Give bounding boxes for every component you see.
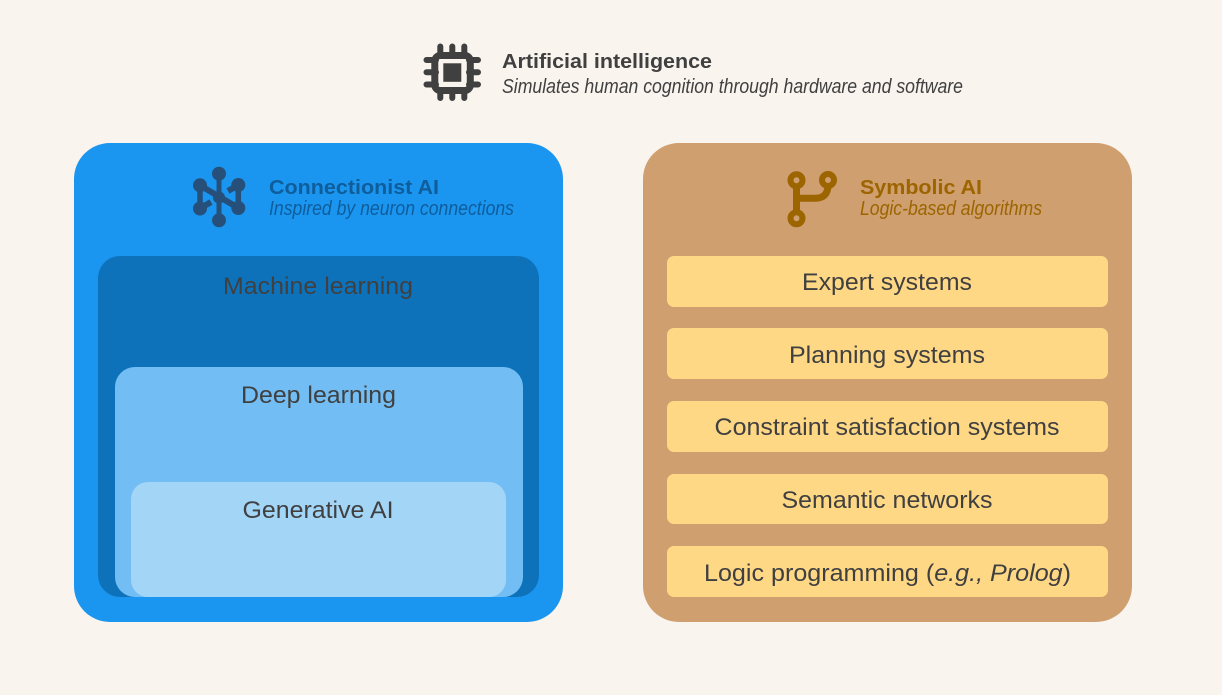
subtitle: Simulates human cognition through hardware and software — [502, 75, 963, 98]
header: artificial intelligence — [426, 46, 963, 98]
panel: connectionist AI — [74, 143, 563, 622]
icon: microchip — [426, 46, 478, 98]
subheading: logic-based algorithms: Logic-based algorithms — [860, 197, 1042, 220]
item: semantic networks — [667, 474, 1108, 524]
item: expert systems — [667, 256, 1108, 307]
item: planning systems — [667, 328, 1108, 379]
item: semantic networks: Semantic networks — [782, 487, 992, 514]
box: machine learning: Machine learning — [223, 273, 413, 300]
item: constraint satisfaction systems — [667, 401, 1108, 452]
box: generative AI — [131, 482, 506, 597]
item: logic programming — [667, 546, 1108, 597]
title: Artificial intelligence — [502, 51, 712, 73]
box: deep learning: Deep learning — [241, 382, 396, 409]
box: generative AI: Generative AI — [242, 497, 394, 524]
heading: connectionist AI: Connectionist AI — [269, 177, 439, 199]
item: planning systems: Planning systems — [789, 342, 985, 369]
panel: symbolic AI — [643, 143, 1132, 622]
item: logic programming: Logic programming ( e.g., Prolog) — [704, 560, 1071, 587]
icon: code branch — [790, 174, 834, 224]
heading: symbolic AI: Symbolic AI — [860, 177, 982, 199]
box: machine learning — [98, 256, 539, 597]
item: expert systems: Expert systems — [802, 269, 972, 296]
icon: neuron network — [193, 167, 245, 227]
subheading: inspired by neuron connections: Inspired by neuron connections — [269, 197, 514, 220]
item: constraint satisfaction systems: Constraint satisfaction systems — [714, 414, 1060, 441]
box: deep learning — [115, 367, 523, 597]
